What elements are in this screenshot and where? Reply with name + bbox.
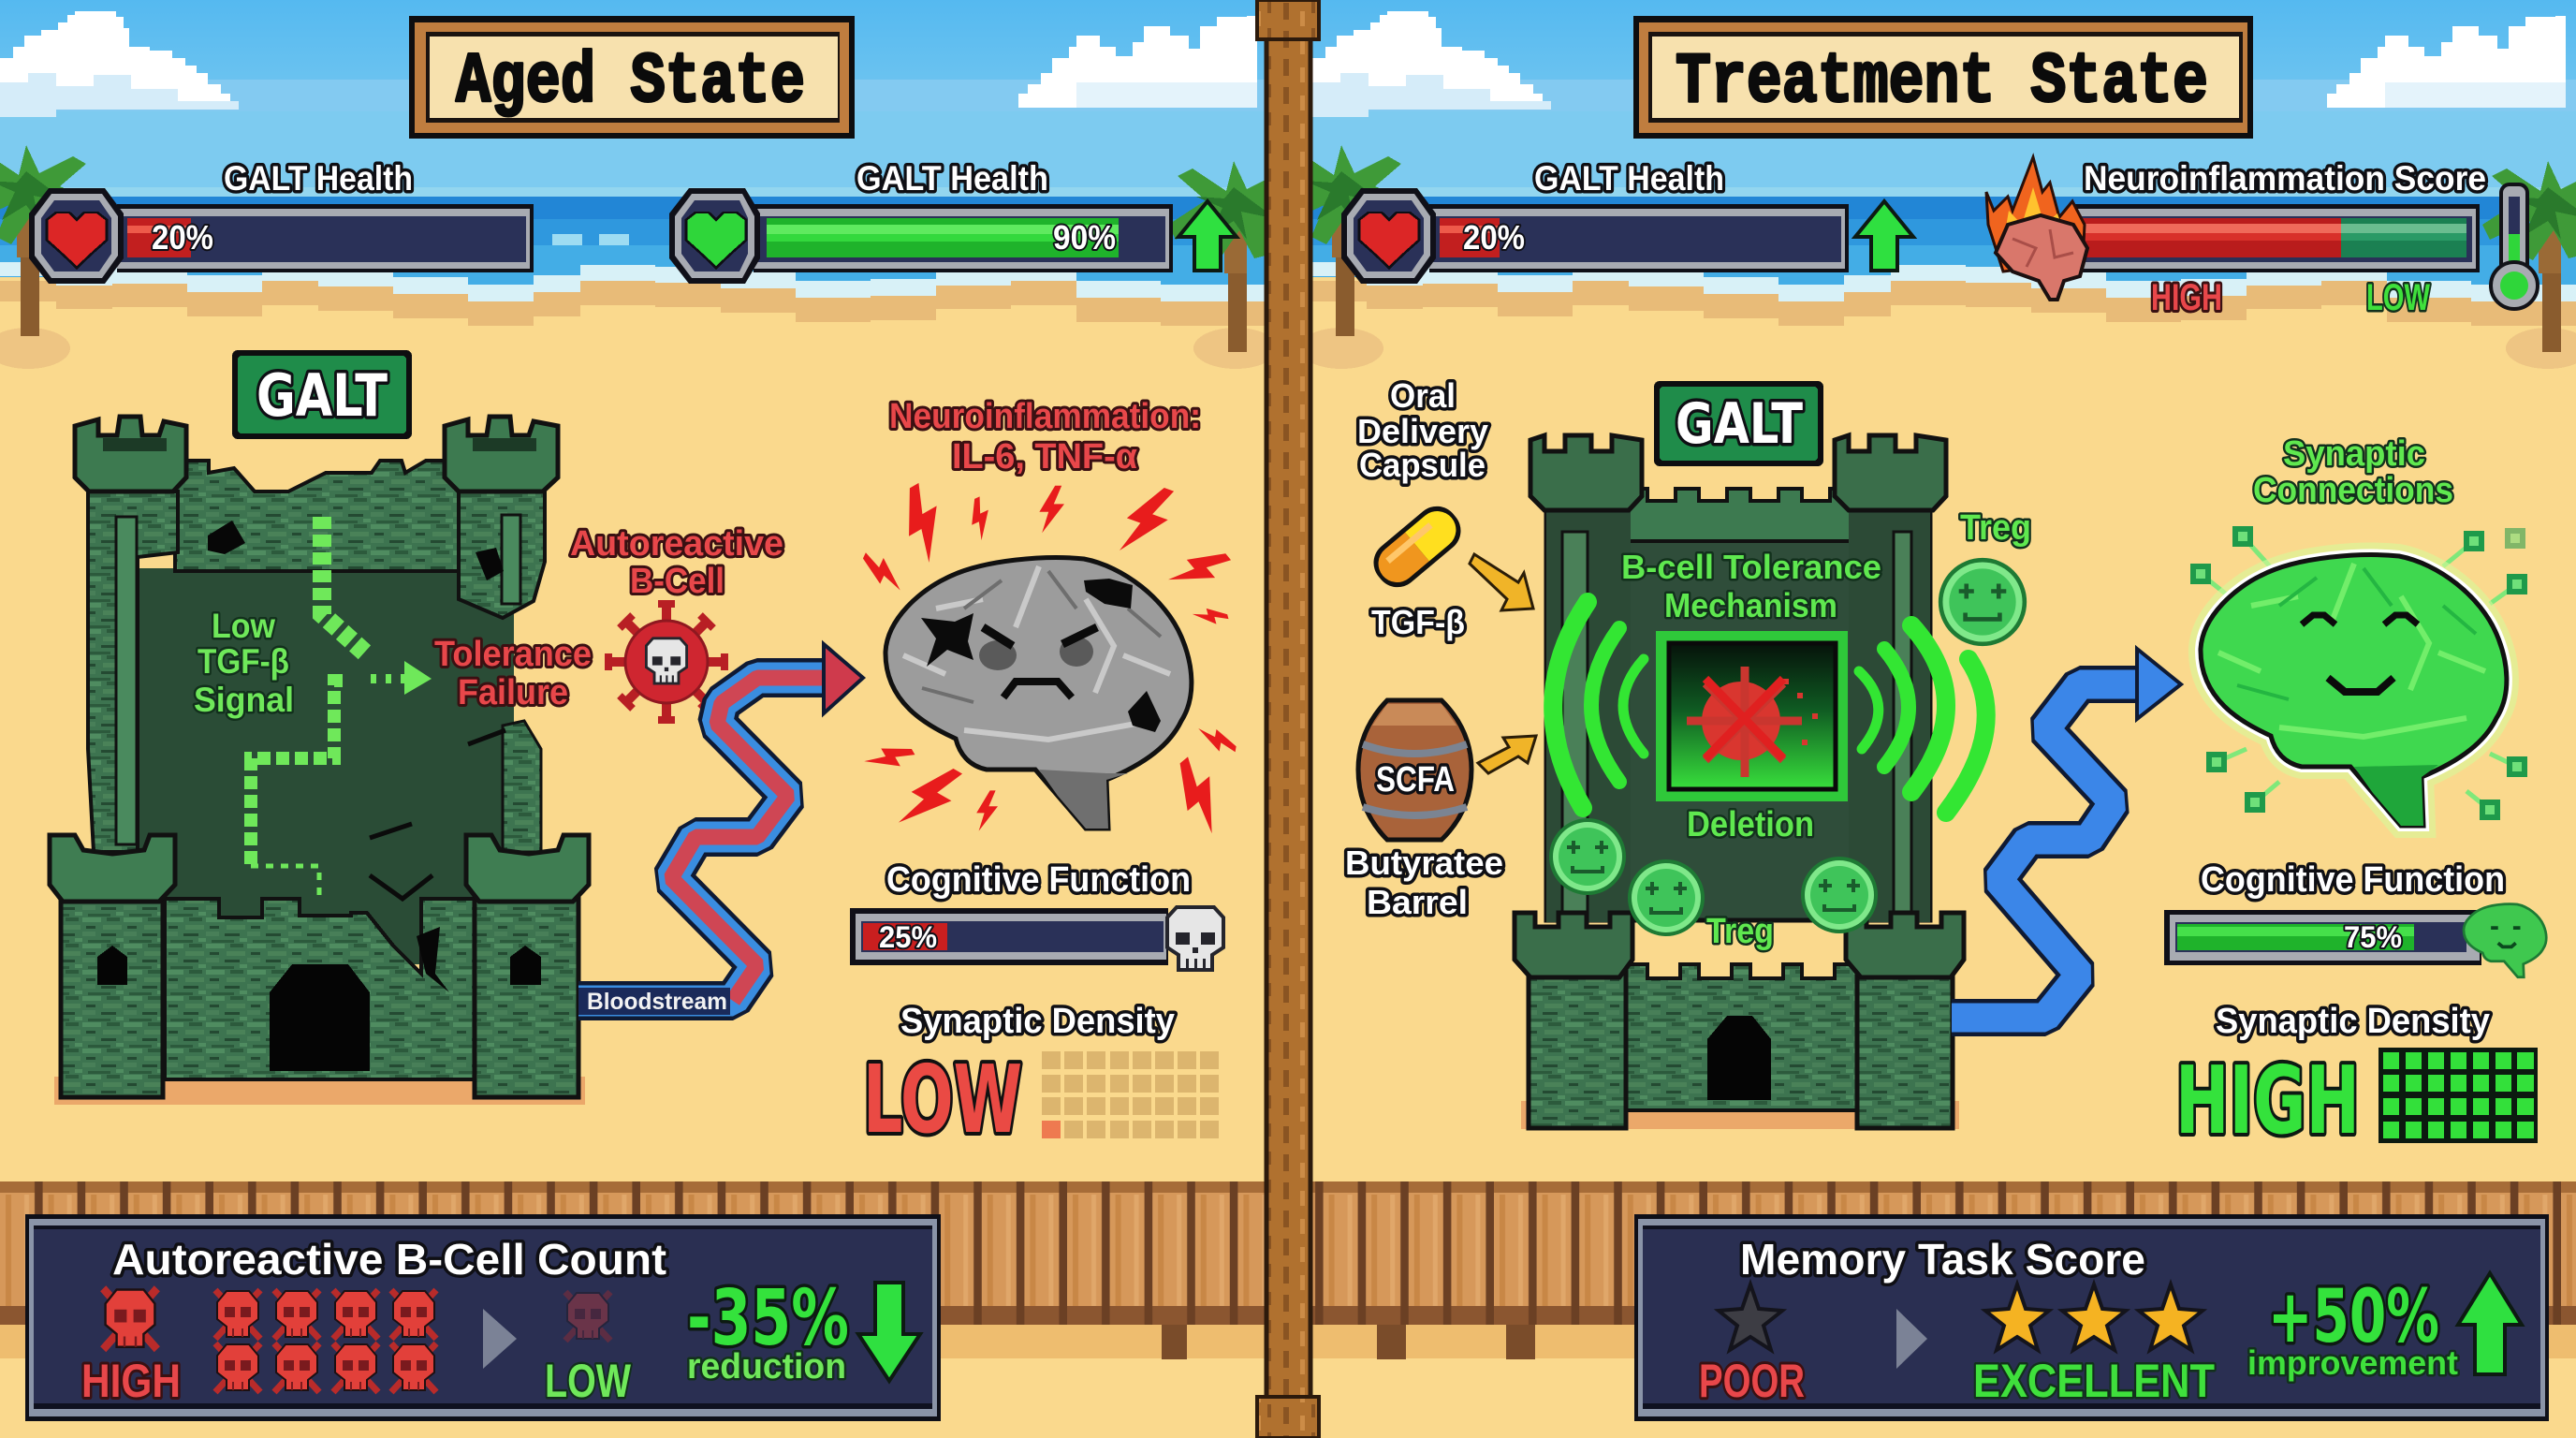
- panel: memory task score: +50%: [2268, 1275, 2439, 1359]
- label: neuroinflammation: [889, 397, 1201, 477]
- icons: treg cells: [1549, 558, 2027, 936]
- bar: cognitive function 75%: [2164, 904, 2546, 977]
- label: oral delivery capsule: Delivery: [1357, 412, 1488, 450]
- arrow: poor to excellent: [1896, 1309, 1927, 1369]
- grid: low synaptic density: [1042, 1051, 1219, 1138]
- icon: scfa barrel: SCFA: [1376, 760, 1455, 800]
- arrow: reduction down: [858, 1283, 920, 1381]
- label: synaptic connections: Synaptic: [2283, 434, 2425, 474]
- status bar: galt health 90%: GALT Health: [856, 159, 1048, 198]
- status bar: neuroinflammation score: [2073, 159, 2486, 272]
- damaged galt castle: [50, 417, 589, 1105]
- palm trees: [0, 145, 2576, 352]
- badge: galt: GALT: [256, 361, 388, 430]
- label: autoreactive b-cell: Autoreactive: [570, 524, 783, 564]
- title sign: treatment state: Treatment State: [1676, 42, 2208, 123]
- label: neuroinflammation: Neuroinflammation:: [889, 397, 1201, 436]
- panel: autoreactive b-cell count: Autoreactive B-Cell Count: [112, 1235, 666, 1284]
- icon: dark star: [1719, 1284, 1782, 1350]
- icon: capsule: [1365, 497, 1470, 596]
- label: neuroinflammation: IL-6, TNF-α: [952, 437, 1137, 477]
- arrow: improvement up: [2458, 1273, 2522, 1374]
- arrow: galt health up: [1855, 201, 1913, 271]
- arrow: capsule to castle: [1470, 554, 1533, 610]
- label: oral delivery capsule: Oral: [1390, 376, 1456, 415]
- arrow: galt health up: [1178, 201, 1237, 271]
- badge: galt: [1654, 381, 1823, 466]
- icons: three gold stars: [1985, 1284, 2203, 1350]
- icon: autoreactive b-cell virus: [608, 604, 724, 720]
- label: oral delivery capsule: Capsule: [1359, 446, 1486, 484]
- label: oral delivery capsule: [1357, 376, 1488, 484]
- icon: scfa barrel: [1358, 700, 1471, 840]
- wooden fence: [0, 1181, 2576, 1359]
- label: tolerance failure: [434, 635, 592, 712]
- label: synaptic connections: [2253, 434, 2453, 510]
- status bar: neuroinflammation score: Neuroinflammation Score: [2084, 159, 2486, 198]
- label: treg right: Treg: [1960, 508, 2031, 548]
- status bar: galt health 20%: [1341, 159, 1849, 284]
- blue bloodstream path: [1952, 649, 2181, 1018]
- panel: autoreactive b-cell count: [25, 1214, 941, 1421]
- label: low density: LOW: [863, 1045, 1022, 1154]
- labels: high and low: HIGH: [2151, 277, 2222, 318]
- panel: memory task score: EXCELLENT: [1973, 1355, 2215, 1407]
- label: treg bottom: Treg: [1706, 912, 1774, 951]
- panel: memory task score: [1634, 1214, 2549, 1421]
- clouds: [0, 11, 2566, 117]
- green tolerance wave arcs: [1553, 602, 1986, 813]
- center divider post: [1257, 0, 1319, 1438]
- status bar: galt health 90%: [669, 159, 1173, 284]
- label: synaptic density: Synaptic Density: [900, 1002, 1175, 1041]
- status bar: galt health 20%: 20%: [152, 218, 213, 257]
- label: low tgf-beta signal: [194, 607, 294, 719]
- panel: autoreactive b-cell count: HIGH: [81, 1355, 181, 1407]
- label: tolerance failure: Failure: [458, 673, 568, 712]
- icon: damaged grey brain: [886, 558, 1192, 829]
- icons: eight red skulls: [215, 1290, 436, 1392]
- icon: thermometer: [2491, 184, 2538, 309]
- badge: galt: GALT: [1676, 391, 1803, 457]
- bloodstream path: [578, 644, 863, 1001]
- label: tolerance failure: Tolerance: [434, 635, 592, 674]
- title sign: treatment state: [1633, 16, 2253, 139]
- label: b-cell tolerance mechanism: [1621, 548, 1881, 624]
- panel: treatment state: [1341, 16, 2549, 1421]
- panel: memory task score: improvement: [2247, 1343, 2458, 1382]
- label: low tgf-beta signal: Signal: [194, 681, 294, 719]
- icon: lightning sparks: [856, 479, 1238, 840]
- status bar: galt health 20%: GALT Health: [1534, 159, 1724, 198]
- arrow: barrel to castle: [1478, 736, 1536, 773]
- label: b-cell tolerance mechanism: B-cell Tolerance: [1621, 548, 1881, 586]
- icon: happy green brain: [2201, 555, 2507, 826]
- panel: aged state: [25, 16, 1238, 1421]
- label: butyrate barrel: [1345, 844, 1503, 921]
- label: low tgf-beta signal: Low: [212, 607, 275, 645]
- label: autoreactive b-cell: [570, 524, 783, 601]
- label: synaptic connections: Connections: [2253, 471, 2453, 510]
- bar: cognitive function 25%: [850, 907, 1223, 970]
- bar: cognitive function 75%: 75%: [2344, 920, 2402, 954]
- icon: deleted b-cell: [1687, 667, 1818, 777]
- icon: flaming brain: [1986, 157, 2087, 300]
- label: butyrate barrel: Barrel: [1367, 883, 1468, 921]
- healthy galt castle: [1515, 435, 1964, 1129]
- labels: high and low: LOW: [2366, 277, 2430, 318]
- dashed tgf-beta signal path: [251, 517, 432, 902]
- badge: galt: [232, 350, 412, 439]
- bar: cognitive function 25%: 25%: [879, 920, 937, 954]
- panel: autoreactive b-cell count: LOW: [545, 1355, 632, 1407]
- status bar: galt health 20%: 20%: [1463, 218, 1525, 257]
- label: deletion: Deletion: [1687, 805, 1814, 844]
- icon: small happy brain: [2464, 904, 2546, 977]
- deletion chamber: [1661, 637, 1842, 796]
- panel: memory task score: POOR: [1699, 1355, 1805, 1407]
- label: autoreactive b-cell: B-Cell: [630, 562, 724, 601]
- icon: large red skull: [103, 1288, 157, 1349]
- label: low tgf-beta signal: TGF-β: [198, 642, 289, 681]
- icons: synapse nodes: [2190, 526, 2527, 820]
- arrow: high to low: [483, 1309, 517, 1369]
- label: tgf-beta: TGF-β: [1371, 603, 1465, 641]
- panel: memory task score: Memory Task Score: [1740, 1235, 2145, 1284]
- label: synaptic density: Synaptic Density: [2216, 1002, 2490, 1041]
- label: high density: HIGH: [2175, 1046, 2360, 1155]
- label: b-cell tolerance mechanism: Mechanism: [1664, 586, 1837, 624]
- grid: high synaptic density: [2378, 1048, 2538, 1143]
- icon: faded skull: [565, 1292, 610, 1341]
- label: cognitive function: Cognitive Function: [2201, 860, 2505, 900]
- status bar: galt health 90%: 90%: [1053, 218, 1116, 257]
- panel: autoreactive b-cell count: reduction: [687, 1347, 846, 1387]
- labels: high and low: [2151, 277, 2430, 318]
- title sign: aged state: Aged State: [456, 42, 805, 123]
- title sign: aged state: [409, 16, 855, 139]
- status bar: galt health 20%: [29, 159, 534, 284]
- label: bloodstream: Bloodstream: [587, 989, 727, 1015]
- panel: autoreactive b-cell count: -35%: [687, 1274, 849, 1363]
- label: cognitive function: Cognitive Function: [886, 860, 1191, 900]
- label: butyrate barrel: Butyratee: [1345, 844, 1503, 882]
- status bar: galt health 20%: GALT Health: [224, 159, 413, 198]
